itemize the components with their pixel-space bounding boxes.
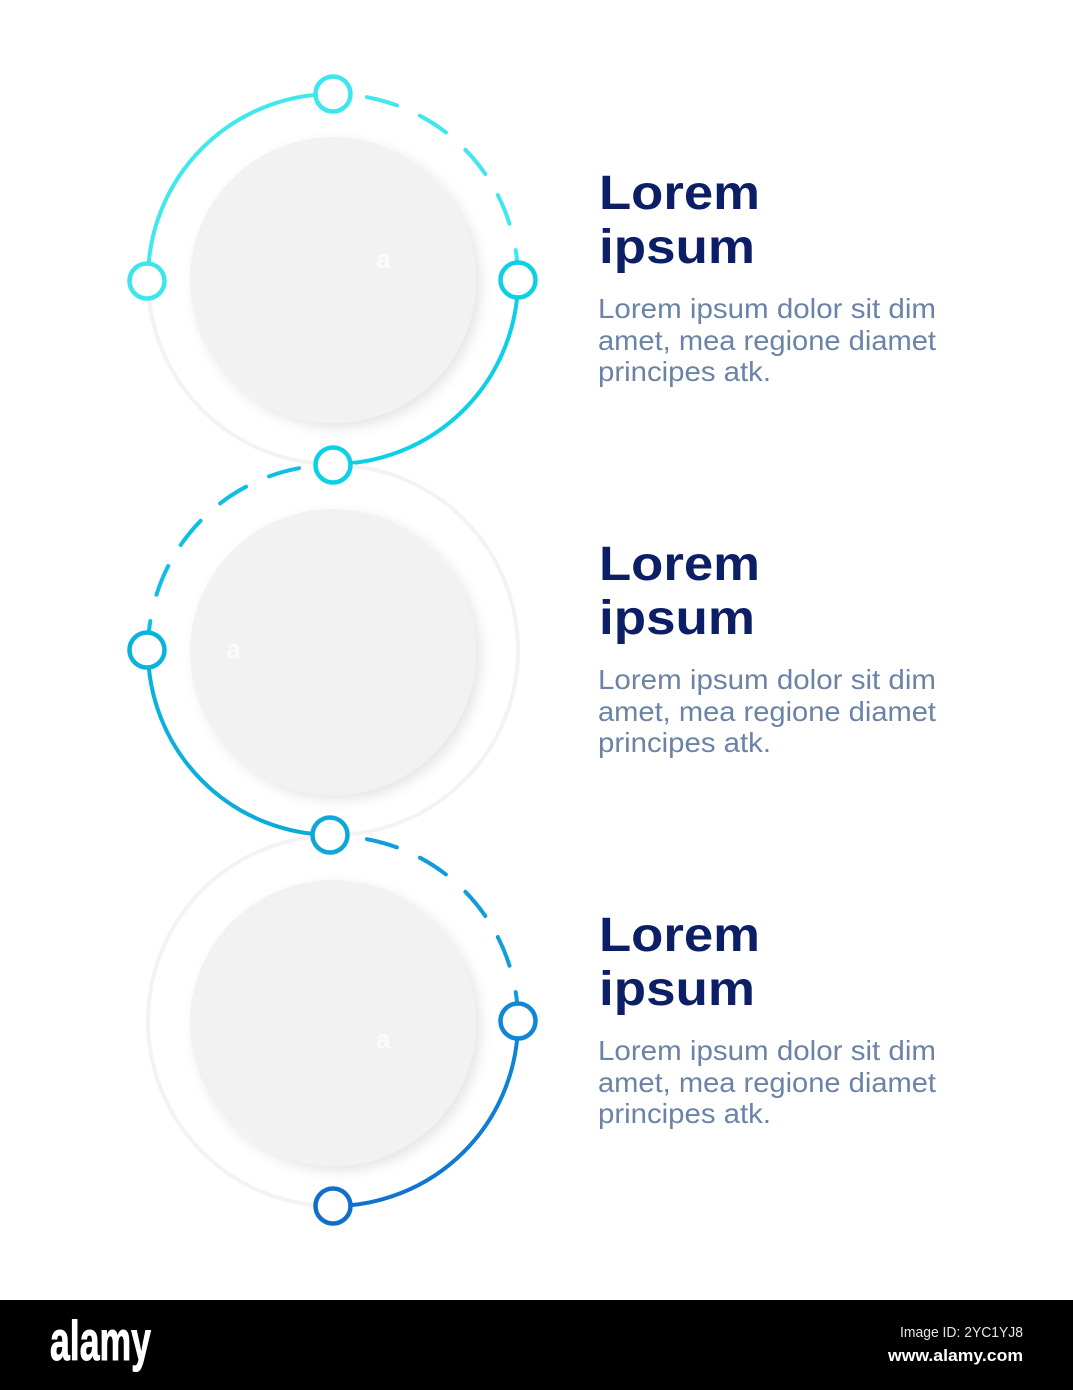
step 1 heading: ipsum xyxy=(599,221,755,274)
step 2 solid arc left to bottom xyxy=(148,650,333,835)
website: www.alamy.com xyxy=(887,1346,1023,1365)
step 1 heading: Lorem xyxy=(599,167,760,220)
step 1 description xyxy=(598,293,936,387)
image id: Image ID: 2YC1YJ8 xyxy=(900,1324,1023,1341)
step 3 node right xyxy=(500,1004,536,1038)
step 2 description: amet, mea regione diamet xyxy=(598,696,936,727)
step 3 grey ring xyxy=(148,837,333,1206)
step 1 diagram xyxy=(130,76,536,464)
step 3 heading: Lorem xyxy=(599,909,760,962)
step 2 diagram xyxy=(130,448,518,852)
step 1 solid arc right to bottom xyxy=(333,279,518,464)
step 2 node top xyxy=(316,448,350,482)
step 2 centre disc xyxy=(190,509,476,795)
step 1 centre disc xyxy=(190,137,476,423)
step 1 solid arc top to left xyxy=(148,94,333,279)
step 3 heading xyxy=(599,909,760,1016)
step 2 description: principes atk. xyxy=(598,727,771,758)
step 3 description: principes atk. xyxy=(598,1098,771,1129)
step 1 node right xyxy=(500,262,536,298)
step 2 heading: Lorem xyxy=(599,538,760,591)
step 3 text block xyxy=(598,909,936,1129)
step 1 description: principes atk. xyxy=(598,356,771,387)
step 3 dashed arc top to right xyxy=(367,839,517,1002)
step 1 heading xyxy=(599,167,760,274)
step 2 dashed arc top to left xyxy=(149,468,299,631)
step 2 grey ring xyxy=(333,465,518,835)
step 3 description: Lorem ipsum dolor sit dim xyxy=(598,1035,936,1066)
step 1 node top xyxy=(316,76,350,112)
step 2 description xyxy=(598,664,936,758)
step 1 text block xyxy=(598,167,936,387)
step 2 heading xyxy=(599,538,760,645)
watermark glyph: a xyxy=(226,634,241,664)
watermark glyph: a xyxy=(376,1024,391,1054)
step 3 description xyxy=(598,1035,936,1129)
step 1 description: amet, mea regione diamet xyxy=(598,325,936,356)
step 1 grey ring xyxy=(148,279,333,464)
step 3 solid arc right to bottom xyxy=(333,1021,518,1206)
step 1 description: Lorem ipsum dolor sit dim xyxy=(598,293,936,324)
step 1 node left xyxy=(130,264,164,298)
step 3 heading: ipsum xyxy=(599,963,755,1016)
step 3 centre disc xyxy=(190,880,476,1166)
step 3 diagram xyxy=(148,837,536,1224)
step 2 description: Lorem ipsum dolor sit dim xyxy=(598,664,936,695)
watermark glyph: a xyxy=(376,244,391,274)
step 2 node bottom xyxy=(312,818,348,852)
step 1 dashed arc top to right xyxy=(367,97,517,260)
footer logo: alamy xyxy=(50,1309,151,1372)
step 2 node left xyxy=(130,632,164,668)
step 3 description: amet, mea regione diamet xyxy=(598,1067,936,1098)
step 2 text block xyxy=(598,538,936,758)
step 3 node bottom xyxy=(316,1188,350,1224)
step 2 heading: ipsum xyxy=(599,592,755,645)
footer bar xyxy=(0,1300,1073,1390)
